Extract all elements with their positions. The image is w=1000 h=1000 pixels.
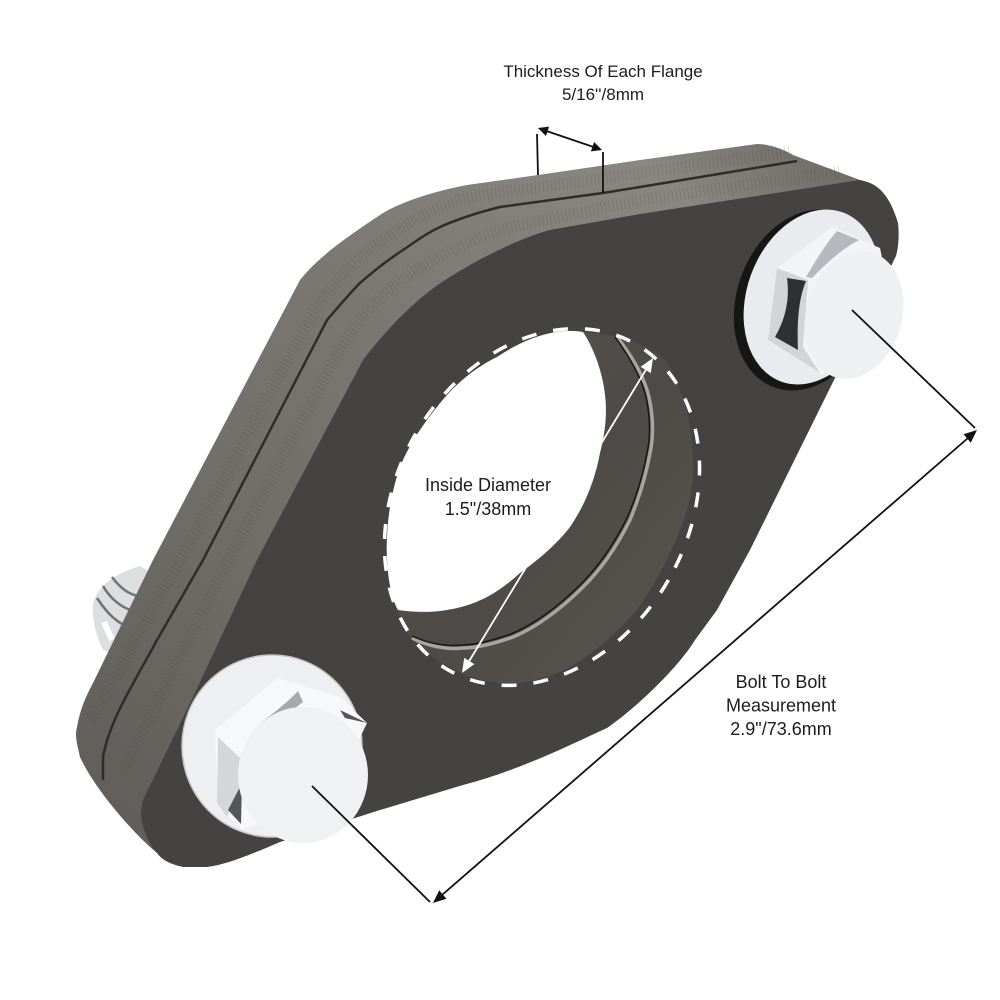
inside diameter label: 1.5"/38mm [445,499,531,519]
bore interior [398,332,693,683]
thickness dimension arrow [537,127,603,193]
washer [182,655,362,837]
inside diameter dashed circle [322,271,762,743]
bolt to bolt dimension lines [312,310,977,903]
protruding bolt thread [93,566,150,652]
flange front face [141,180,899,867]
band texture [92,152,790,720]
inside diameter label: Inside Diameter [425,475,551,495]
bolt to bolt label: Bolt To Bolt [736,672,826,692]
flange side edge [76,144,860,853]
bore opening [387,331,606,612]
hex head [215,678,367,830]
flange body [76,144,899,867]
bolt to bolt label: 2.9"/73.6mm [730,719,832,739]
bore weld ring [412,337,652,648]
upper right bolt [709,189,918,411]
head face [790,239,918,391]
inside diameter arrow [462,358,653,673]
washer [720,190,904,404]
lower left bolt [182,655,368,843]
thickness label: Thickness Of Each Flange [503,62,703,81]
bolt shadow [709,189,903,411]
hex head [768,227,895,375]
weld seam [103,161,797,780]
bolt to bolt label: Measurement [726,696,836,716]
head face [238,707,368,843]
thickness label: 5/16''/8mm [562,85,644,104]
